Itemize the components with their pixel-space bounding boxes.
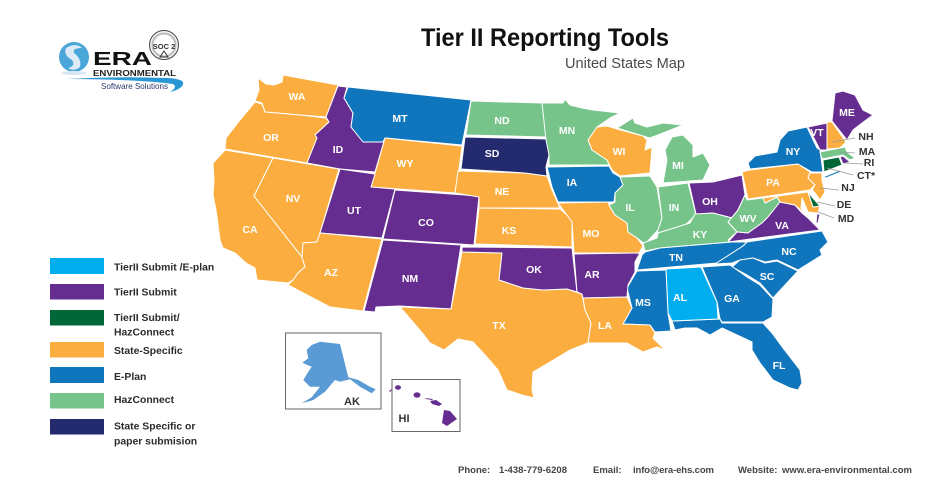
SOC 2 badge: SOC 2: [153, 42, 175, 51]
state: FL: [672, 319, 802, 390]
northeast callout labels with leader lines: DE: [837, 199, 851, 211]
map: contiguous US states: [213, 75, 873, 398]
legend item: E-Plan: E-Plan: [114, 372, 146, 383]
state labels on map: MS: [635, 297, 651, 309]
state: ND: [466, 101, 547, 137]
footer contact line: info@era-ehs.com: [633, 465, 714, 476]
footer contact line: 1-438-779-6208: [499, 465, 567, 476]
state: CA: [213, 150, 305, 283]
state: MO: [558, 202, 643, 253]
islands: [389, 385, 457, 426]
state: UT: [320, 169, 395, 238]
state labels on map: PA: [766, 177, 780, 189]
legend item: TierII Submit/HazConnect: TierII Submit/: [114, 313, 180, 324]
state: AL: [666, 267, 718, 321]
state: MD: [763, 192, 820, 214]
footer contact line: Email:: [593, 465, 622, 476]
legend item: State-Specific: [50, 342, 183, 358]
state: CT: [823, 157, 842, 172]
state: ID: [307, 86, 385, 172]
northeast callout labels with leader lines: MA: [859, 146, 876, 158]
state labels on map: WI: [613, 146, 625, 158]
state: NE: [455, 171, 560, 208]
state: VA: [728, 202, 820, 242]
legend item: State Specific or paper submision: State Specific or: [114, 422, 195, 432]
state labels on map: OH: [702, 196, 718, 208]
state: MT: [344, 87, 471, 145]
state labels on map: NE: [495, 186, 509, 198]
logo tagline: Software Solutions: [101, 81, 168, 91]
state labels on map: OK: [526, 264, 542, 276]
state: RI: [840, 156, 850, 164]
state: AK: [302, 342, 376, 403]
state: MS: [623, 270, 671, 332]
state labels on map: NM: [402, 273, 418, 285]
state labels on map: KS: [502, 225, 516, 237]
state: NM: [364, 240, 461, 312]
state: OK: [462, 247, 577, 292]
footer contact line: Website:: [738, 465, 777, 476]
state labels on map: CA: [242, 224, 258, 236]
state labels on map: MI: [672, 160, 684, 172]
state: GA: [702, 265, 773, 322]
legend item: E-Plan: [50, 367, 146, 383]
state: TN: [637, 242, 747, 270]
logo swoosh: [67, 77, 183, 92]
state: WI: [588, 126, 652, 176]
footer contact line: www.era-environmental.com: [781, 465, 912, 476]
state labels on map: GA: [724, 293, 740, 305]
state labels on map: VT: [810, 127, 824, 139]
state labels on map: ID: [333, 144, 344, 156]
label: HI: HI: [398, 413, 410, 425]
state labels on map: IL: [625, 202, 635, 214]
state: IN: [657, 183, 696, 233]
state: IL: [609, 176, 662, 244]
logo: ERA Environmental: [59, 30, 183, 92]
northeast callout labels with leader lines: NH: [858, 131, 874, 143]
state labels on map: WA: [289, 91, 306, 103]
state labels on map: ND: [494, 115, 510, 127]
state: DE: [808, 192, 820, 207]
state labels on map: KY: [693, 229, 707, 241]
state: MN: [542, 99, 620, 165]
logo subtitle: ENVIRONMENTAL: [93, 69, 176, 78]
subtitle: United States Map: [565, 56, 685, 72]
state: IA: [547, 166, 623, 202]
state: SC: [732, 258, 798, 298]
state: Long Island: [823, 170, 841, 178]
state: KY: [643, 213, 737, 251]
state: TX: [400, 252, 591, 398]
icon: globe: [59, 42, 89, 75]
state labels on map: SC: [760, 271, 775, 283]
state: AZ: [288, 233, 382, 311]
state: OH: [689, 175, 745, 218]
legend item: HazConnect: HazConnect: [114, 395, 175, 406]
state: WV: [728, 195, 780, 233]
state labels on map: VA: [775, 220, 789, 232]
northeast callout labels with leader lines: NJ: [841, 182, 855, 194]
state labels on map: CO: [418, 217, 434, 229]
legend item: TierII Submit/HazConnect: [50, 310, 180, 338]
legend item: TierII Submit: [50, 284, 177, 300]
label: AK: AK: [344, 396, 360, 408]
state labels on map: AZ: [324, 267, 339, 279]
state labels on map: MT: [392, 113, 408, 125]
state: ME: [832, 91, 873, 140]
state labels on map: MO: [583, 228, 599, 240]
state labels on map: LA: [598, 320, 612, 332]
state: WY: [371, 138, 462, 193]
state: PA: [742, 164, 815, 199]
state: CO: [383, 190, 479, 245]
state labels on map: NY: [786, 146, 800, 158]
state: VT: [808, 123, 827, 150]
state: MA: [820, 147, 855, 160]
state labels on map: [242, 91, 855, 372]
legend: [50, 258, 214, 448]
state labels on map: TN: [669, 252, 683, 264]
state labels on map: OR: [263, 132, 279, 144]
legend item: TierII Submit: TierII Submit: [114, 288, 177, 298]
logo wordmark: ERA: [93, 49, 152, 69]
state: NJ: [808, 173, 825, 200]
footer contact line: [458, 465, 912, 476]
state labels on map: MN: [559, 125, 575, 137]
state labels on map: UT: [347, 205, 362, 217]
northeast callout labels with leader lines: MD: [838, 213, 855, 225]
state: KS: [475, 208, 572, 247]
state: AR: [574, 253, 640, 298]
state: NC: [715, 231, 828, 270]
state: SD: [461, 137, 549, 176]
state labels on map: WY: [397, 158, 413, 170]
legend item: State Specific or paper submision: [50, 419, 197, 448]
state: LA: [583, 297, 665, 352]
state: OR: [225, 102, 329, 163]
legend item: State-Specific: State-Specific: [114, 346, 183, 357]
state: MI upper: [617, 118, 683, 138]
state: NY: [748, 127, 823, 172]
state labels on map: IA: [567, 177, 578, 189]
state labels on map: AL: [673, 292, 688, 304]
northeast callout labels with leader lines: RI: [864, 157, 874, 169]
legend item: TierII Submit/HazConnect: HazConnect: [114, 328, 175, 338]
inset: Alaska: [286, 333, 381, 409]
state: MI lower: [663, 135, 710, 183]
title: Tier II Reporting Tools: [421, 24, 669, 52]
state labels on map: IN: [669, 202, 679, 214]
state labels on map: NV: [286, 193, 300, 205]
state labels on map: WV: [740, 213, 756, 225]
state: NV: [254, 158, 339, 257]
state labels on map: ME: [839, 107, 855, 119]
northeast callout labels with leader lines: [817, 131, 876, 225]
state labels on map: NC: [781, 246, 797, 258]
state labels on map: TX: [492, 320, 506, 332]
legend item: HazConnect: [50, 393, 175, 408]
state: VA shore: [816, 214, 820, 223]
legend item: State Specific or paper submision: paper submision: [114, 436, 197, 448]
state: NH: [827, 122, 846, 149]
northeast callout labels with leader lines: CT*: [857, 170, 876, 182]
state: WA: [255, 75, 338, 117]
footer contact line: Phone:: [458, 465, 490, 476]
state labels on map: AR: [584, 269, 600, 281]
state labels on map: SD: [485, 148, 500, 160]
state labels on map: FL: [773, 360, 786, 372]
inset: Hawaii: [389, 380, 460, 432]
legend item: TierII Submit /E-plan: TierII Submit /E-plan: [114, 262, 214, 274]
legend item: TierII Submit /E-plan: [50, 258, 214, 274]
